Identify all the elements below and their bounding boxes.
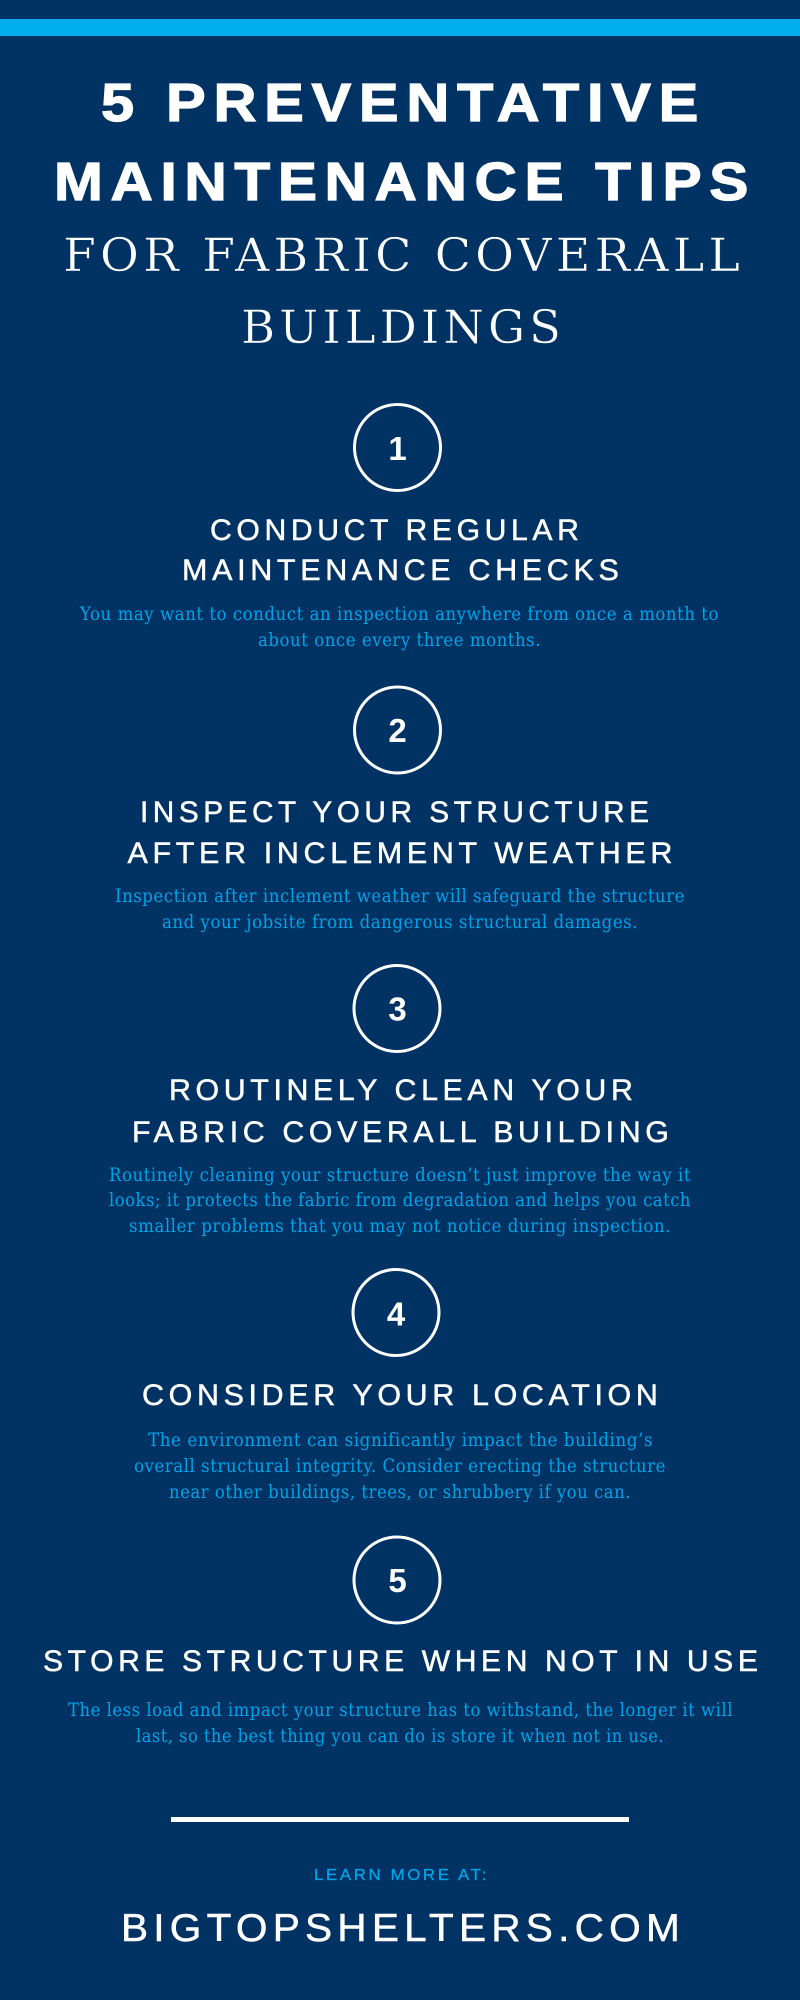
number badge 2: 2 <box>388 712 407 749</box>
tip 3 text: looks; it protects the fabric from degradation and helps you catch <box>109 1190 691 1211</box>
tip 3 text <box>109 1165 691 1237</box>
tip 3 heading <box>132 1074 674 1149</box>
learn more label: LEARN MORE AT: <box>314 1867 489 1884</box>
tip 4 text: near other buildings, trees, or shrubbery if you can. <box>169 1482 631 1503</box>
tip 2 text <box>115 886 685 933</box>
tip 1 <box>79 404 719 651</box>
tip 1 heading <box>182 514 624 587</box>
title: FOR FABRIC COVERALL <box>63 228 744 282</box>
tip 2 text: Inspection after inclement weather will safeguard the structure <box>115 886 685 907</box>
tip 5 <box>43 1537 762 1747</box>
tip 3 text: smaller problems that you may not notice during inspection. <box>129 1216 671 1237</box>
tip 3 heading: ROUTINELY CLEAN YOUR <box>169 1074 638 1107</box>
tip 5 text: The less load and impact your structure has to withstand, the longer it will <box>68 1700 733 1721</box>
number badge 5: 5 <box>388 1562 407 1599</box>
title: BUILDINGS <box>241 300 565 354</box>
tip 3 <box>109 966 691 1237</box>
title: MAINTENANCE TIPS <box>54 152 756 212</box>
tip 2 text: and your jobsite from dangerous structural damages. <box>162 912 638 933</box>
title <box>54 73 756 354</box>
tip 5 text <box>68 1700 733 1747</box>
website url: BIGTOPSHELTERS.COM <box>121 1907 685 1950</box>
tip 2 heading <box>128 796 677 870</box>
tip 3 text: Routinely cleaning your structure doesn’t just improve the way it <box>109 1165 691 1186</box>
tip 4 text <box>134 1430 666 1503</box>
number badge 5 <box>354 1537 440 1623</box>
tip 4 text: The environment can significantly impact the building’s <box>148 1430 653 1451</box>
tip 2 heading: AFTER INCLEMENT WEATHER <box>128 837 677 870</box>
tip 3 heading: FABRIC COVERALL BUILDING <box>132 1116 674 1149</box>
top accent bar <box>0 19 800 36</box>
tip 5 text: last, so the best thing you can do is store it when not in use. <box>136 1726 664 1747</box>
tip 1 text: You may want to conduct an inspection anywhere from once a month to <box>79 604 719 625</box>
number badge 1: 1 <box>388 430 407 467</box>
tip 4 heading: CONSIDER YOUR LOCATION <box>142 1379 662 1412</box>
tip 5 heading: STORE STRUCTURE WHEN NOT IN USE <box>43 1645 762 1678</box>
tip 1 heading: MAINTENANCE CHECKS <box>182 554 624 587</box>
tip 4 <box>134 1270 666 1503</box>
tip 1 text <box>79 604 719 651</box>
tip 2 <box>115 687 685 933</box>
number badge 4 <box>353 1270 439 1356</box>
number badge 3 <box>354 966 440 1052</box>
tip 2 heading: INSPECT YOUR STRUCTURE <box>140 796 654 829</box>
title: 5 PREVENTATIVE <box>101 73 706 133</box>
footer rule <box>171 1817 629 1822</box>
number badge 2 <box>354 687 440 773</box>
tip 1 text: about once every three months. <box>258 630 541 651</box>
tip 4 text: overall structural integrity. Consider erecting the structure <box>134 1456 666 1477</box>
number badge 1 <box>354 404 440 490</box>
number badge 3: 3 <box>388 990 407 1028</box>
tip 1 heading: CONDUCT REGULAR <box>210 514 584 547</box>
number badge 4: 4 <box>387 1296 406 1332</box>
